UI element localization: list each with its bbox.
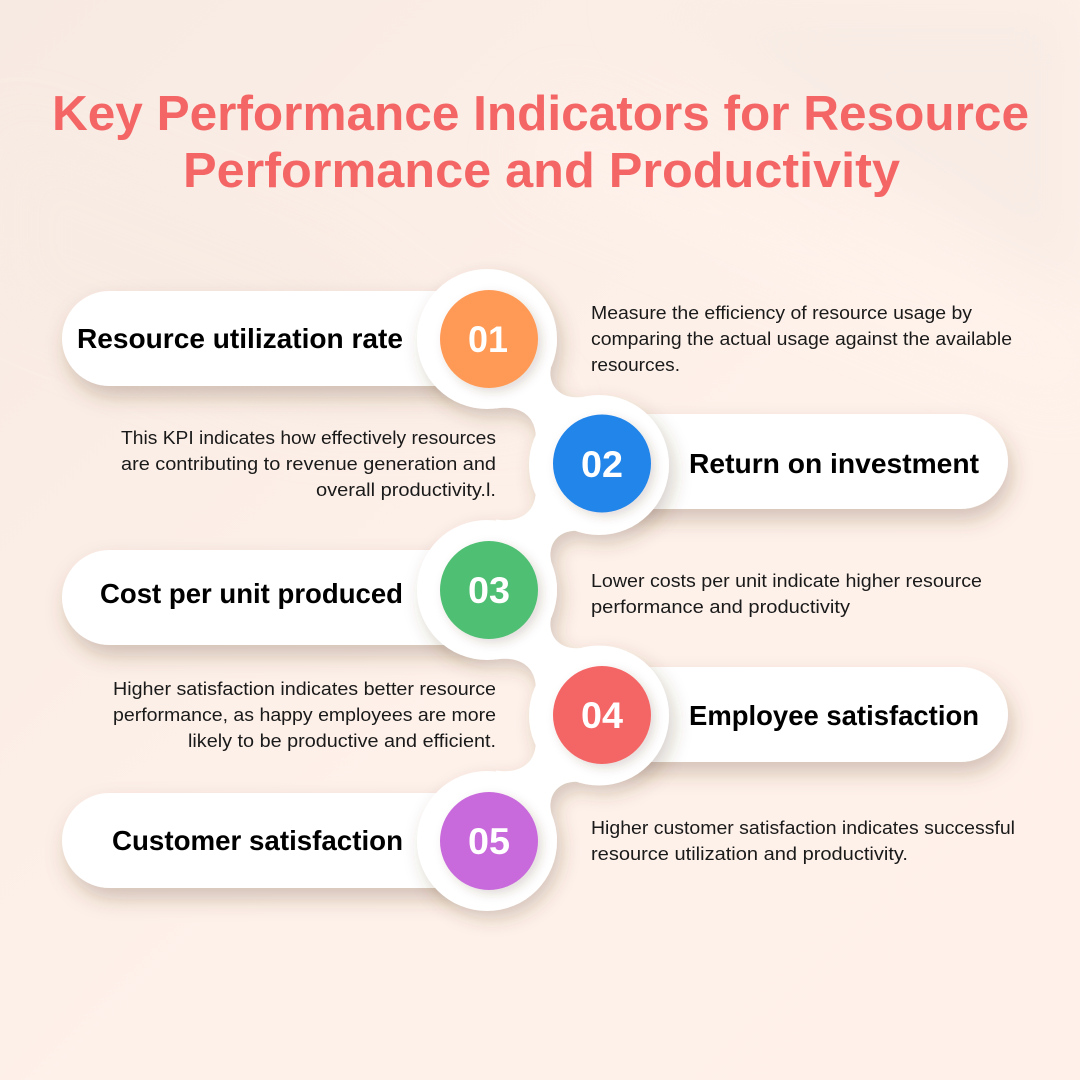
item 02: return on investment: overall productivity.l. xyxy=(316,479,496,500)
connected white node rings xyxy=(417,269,669,911)
title: Performance and Productivity xyxy=(183,144,900,198)
item 03: cost per unit produced: Lower costs per unit indicate higher resource xyxy=(591,570,982,591)
item 01: resource utilization rate: comparing the actual usage against the available xyxy=(591,328,1012,349)
white pills xyxy=(62,291,1008,888)
item 03: cost per unit produced xyxy=(100,541,982,639)
title: Key Performance Indicators for Resource xyxy=(52,87,1029,141)
item 01: resource utilization rate: Resource utilization rate xyxy=(77,323,403,354)
item 01: resource utilization rate: 01 xyxy=(468,319,508,360)
item 01: resource utilization rate: Measure the efficiency of resource usage by xyxy=(591,302,973,323)
item 04: employee satisfaction: performance, as happy employees are more xyxy=(113,704,496,725)
item 04: employee satisfaction: Higher satisfaction indicates better resource xyxy=(113,678,496,699)
item 02: return on investment: This KPI indicates how effectively resources xyxy=(121,427,496,448)
item 05: customer satisfaction: resource utilization and productivity. xyxy=(591,843,908,864)
item 04: employee satisfaction: likely to be productive and efficient. xyxy=(188,730,496,751)
item 05: customer satisfaction: 05 xyxy=(468,821,510,862)
item 02: return on investment xyxy=(121,414,979,512)
item 03: cost per unit produced: performance and productivity xyxy=(591,596,851,617)
item 02: return on investment: Return on investment xyxy=(689,448,979,479)
item 03: cost per unit produced: Cost per unit produced xyxy=(100,578,403,609)
item 04: employee satisfaction xyxy=(113,666,979,764)
item 05: customer satisfaction: Customer satisfaction xyxy=(112,825,403,856)
item 04: employee satisfaction: 04 xyxy=(581,695,623,736)
item 01: resource utilization rate xyxy=(77,290,1012,388)
item 04: employee satisfaction: Employee satisfaction xyxy=(689,700,979,731)
item 05: customer satisfaction xyxy=(112,792,1015,890)
item 05: customer satisfaction: Higher customer satisfaction indicates successful xyxy=(591,817,1015,838)
item 02: return on investment: 02 xyxy=(581,444,623,485)
item 03: cost per unit produced: 03 xyxy=(468,570,510,611)
title xyxy=(52,87,1029,198)
item 02: return on investment: are contributing to revenue generation and xyxy=(121,453,496,474)
item 01: resource utilization rate: resources. xyxy=(591,354,680,375)
